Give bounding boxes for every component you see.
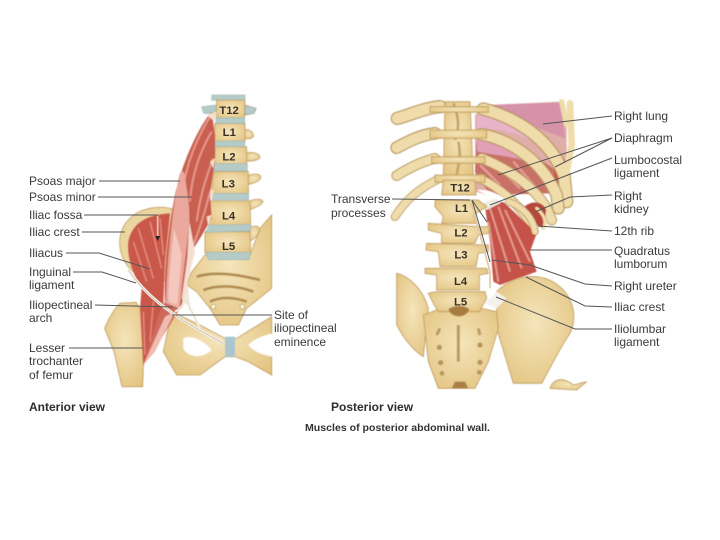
labels: anterior view: iliopectineal bbox=[274, 321, 337, 335]
labels: anterior view: Iliopectineal bbox=[29, 298, 92, 312]
illustration: anterior view bbox=[105, 95, 273, 387]
labels: anterior view: Site of bbox=[274, 308, 309, 322]
labels: posterior view bbox=[331, 109, 682, 349]
labels: anterior view: Iliac fossa bbox=[29, 208, 83, 222]
vertebra labels bbox=[219, 105, 239, 253]
illustration: posterior view bbox=[395, 102, 587, 390]
labels: posterior view: Transverse bbox=[331, 192, 391, 206]
labels: anterior view: arch bbox=[29, 311, 52, 325]
labels: posterior view: Right ureter bbox=[614, 279, 677, 293]
iliac wing rim bbox=[120, 207, 175, 282]
labels: anterior view bbox=[29, 174, 337, 382]
spine posterior bbox=[425, 102, 490, 316]
right kidney bbox=[522, 202, 546, 228]
femur bbox=[105, 302, 145, 387]
leader lines: anterior bbox=[66, 181, 272, 348]
labels: anterior view: Iliacus bbox=[29, 246, 63, 260]
caption: Muscles of posterior abdominal wall. bbox=[305, 423, 490, 434]
labels: posterior view: Lumbocostal bbox=[614, 153, 682, 167]
12th rib bbox=[508, 202, 545, 232]
arrow in iliac fossa bbox=[155, 216, 160, 237]
leader lines: posterior bbox=[392, 116, 612, 329]
labels: posterior view: 12th rib bbox=[614, 224, 654, 238]
labels: posterior view: lumborum bbox=[614, 257, 667, 271]
vertebra labels: T12 bbox=[450, 182, 470, 194]
labels: posterior view: ligament bbox=[614, 166, 660, 180]
vertebra labels: L5 bbox=[454, 297, 467, 309]
lung and diaphragm behind ribs bbox=[475, 102, 567, 195]
labels: posterior view: kidney bbox=[614, 202, 649, 216]
vertebra labels: L3 bbox=[222, 178, 235, 190]
iliolumbar ligament bbox=[485, 292, 507, 308]
labels: anterior view: Psoas major bbox=[29, 174, 96, 188]
heading: anterior view: Anterior view bbox=[29, 400, 106, 414]
vertebra labels: L2 bbox=[454, 228, 468, 240]
ribs bbox=[395, 102, 572, 230]
labels: posterior view: Iliac crest bbox=[614, 300, 665, 314]
vertebra labels: L5 bbox=[222, 241, 235, 253]
labels: posterior view: Quadratus bbox=[614, 244, 670, 258]
vertebra labels: L4 bbox=[454, 276, 468, 288]
pelvis posterior bbox=[397, 273, 587, 390]
labels: posterior view: Right bbox=[614, 189, 643, 203]
vertebra labels: T12 bbox=[219, 105, 239, 117]
heading: posterior view: Posterior view bbox=[331, 400, 414, 414]
labels: posterior view: Right lung bbox=[614, 109, 668, 123]
vertebra labels: L1 bbox=[223, 127, 236, 139]
lumbar spine bbox=[202, 95, 263, 260]
labels: anterior view: Inguinal bbox=[29, 265, 71, 279]
vertebra labels: L1 bbox=[455, 203, 468, 215]
labels: anterior view: ligament bbox=[29, 278, 75, 292]
pelvis anterior bbox=[120, 207, 273, 375]
vertebra labels: L3 bbox=[454, 250, 468, 262]
labels: anterior view: Psoas minor bbox=[29, 190, 96, 204]
iliacus muscle bbox=[128, 213, 180, 365]
labels: anterior view: of femur bbox=[29, 368, 73, 382]
vertebra labels: L2 bbox=[222, 152, 236, 164]
labels: posterior view: processes bbox=[331, 206, 386, 220]
labels: anterior view: trochanter bbox=[29, 354, 83, 368]
labels: posterior view: Iliolumbar bbox=[614, 322, 666, 336]
vertebra labels: L4 bbox=[222, 211, 236, 223]
right ureter bbox=[471, 202, 490, 288]
vertebra labels bbox=[450, 182, 470, 309]
labels: posterior view: ligament bbox=[614, 335, 660, 349]
inguinal ligament and iliopectineal arch bbox=[128, 270, 223, 343]
labels: posterior view: Diaphragm bbox=[614, 131, 673, 145]
psoas major and minor bbox=[165, 112, 217, 308]
labels: anterior view: eminence bbox=[274, 335, 326, 349]
quadratus lumborum bbox=[477, 190, 537, 285]
labels: anterior view: Iliac crest bbox=[29, 225, 80, 239]
labels: anterior view: Lesser bbox=[29, 341, 65, 355]
